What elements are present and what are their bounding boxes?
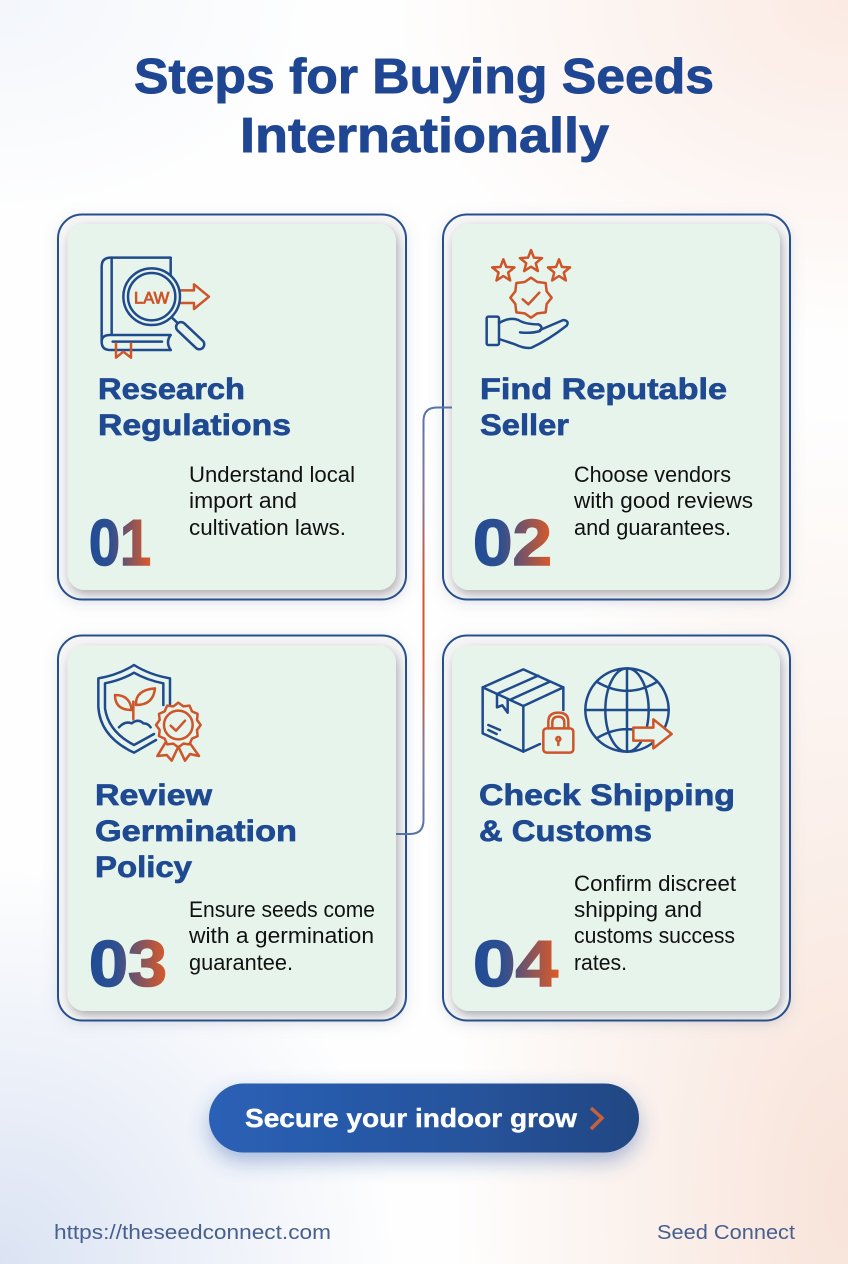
- description: [189, 462, 355, 540]
- description: rates.: [574, 950, 627, 975]
- description: and guarantees.: [574, 515, 731, 540]
- description: Choose vendors: [574, 462, 731, 487]
- title: Internationally: [240, 109, 609, 163]
- panel: step 4 check shipping and customs: [443, 636, 790, 1020]
- heading: Regulations: [98, 409, 291, 442]
- icon: law book with magnifier: [102, 258, 209, 358]
- step number: 02: [473, 506, 552, 579]
- heading: [95, 779, 297, 884]
- icon: locked box and globe with arrow: [483, 668, 672, 753]
- description: Understand local: [189, 462, 355, 487]
- heading: [98, 373, 291, 442]
- icon: chevron: [591, 1108, 602, 1129]
- heading: & Customs: [479, 815, 652, 848]
- call to action button: [209, 1084, 639, 1152]
- call to action button: Secure your indoor grow: [245, 1103, 578, 1133]
- heading: [480, 373, 727, 442]
- description: guarantee.: [189, 950, 293, 975]
- connector line between steps: [396, 408, 452, 834]
- footer brand: Seed Connect: [657, 1222, 795, 1244]
- heading: [479, 779, 735, 848]
- card surface: [68, 646, 396, 1011]
- step number: 04: [473, 927, 558, 1000]
- description: customs success: [574, 923, 735, 948]
- icon: shield with seedling and rosette: [98, 665, 201, 761]
- description: cultivation laws.: [189, 515, 346, 540]
- step number: 03: [89, 927, 167, 1000]
- description: Confirm discreet: [574, 871, 737, 896]
- title: Steps for Buying Seeds: [134, 50, 714, 104]
- icon: hand with stars and badge: [487, 250, 570, 348]
- heading: Research: [98, 373, 245, 406]
- heading: Germination: [95, 815, 297, 848]
- heading: Check Shipping: [479, 779, 735, 812]
- description: [188, 897, 375, 975]
- card frame: [58, 214, 406, 600]
- description: import and: [189, 488, 297, 513]
- title: [134, 50, 714, 163]
- card surface: [452, 224, 780, 590]
- card frame: [58, 636, 406, 1020]
- panel: step 3 review germination policy: [58, 636, 406, 1020]
- description: shipping and: [574, 897, 702, 922]
- description: [573, 462, 753, 540]
- heading: Find Reputable: [480, 373, 727, 406]
- heading: Policy: [95, 851, 192, 884]
- description: [574, 871, 737, 975]
- description: Ensure seeds come: [189, 897, 375, 922]
- panel: step 1 research regulations: [58, 214, 406, 600]
- card frame: [443, 214, 790, 600]
- heading: Review: [95, 779, 213, 812]
- panel: step 2 find reputable seller: [443, 214, 790, 600]
- description: with good reviews: [573, 488, 753, 513]
- card frame: [443, 636, 790, 1020]
- card surface: [452, 646, 780, 1011]
- step number: 01: [89, 506, 151, 579]
- card surface: [68, 224, 396, 590]
- icon: law book with magnifier: LAW: [134, 289, 170, 308]
- description: with a germination: [188, 923, 374, 948]
- heading: Seller: [480, 409, 569, 442]
- footer url: https://theseedconnect.com: [54, 1222, 331, 1244]
